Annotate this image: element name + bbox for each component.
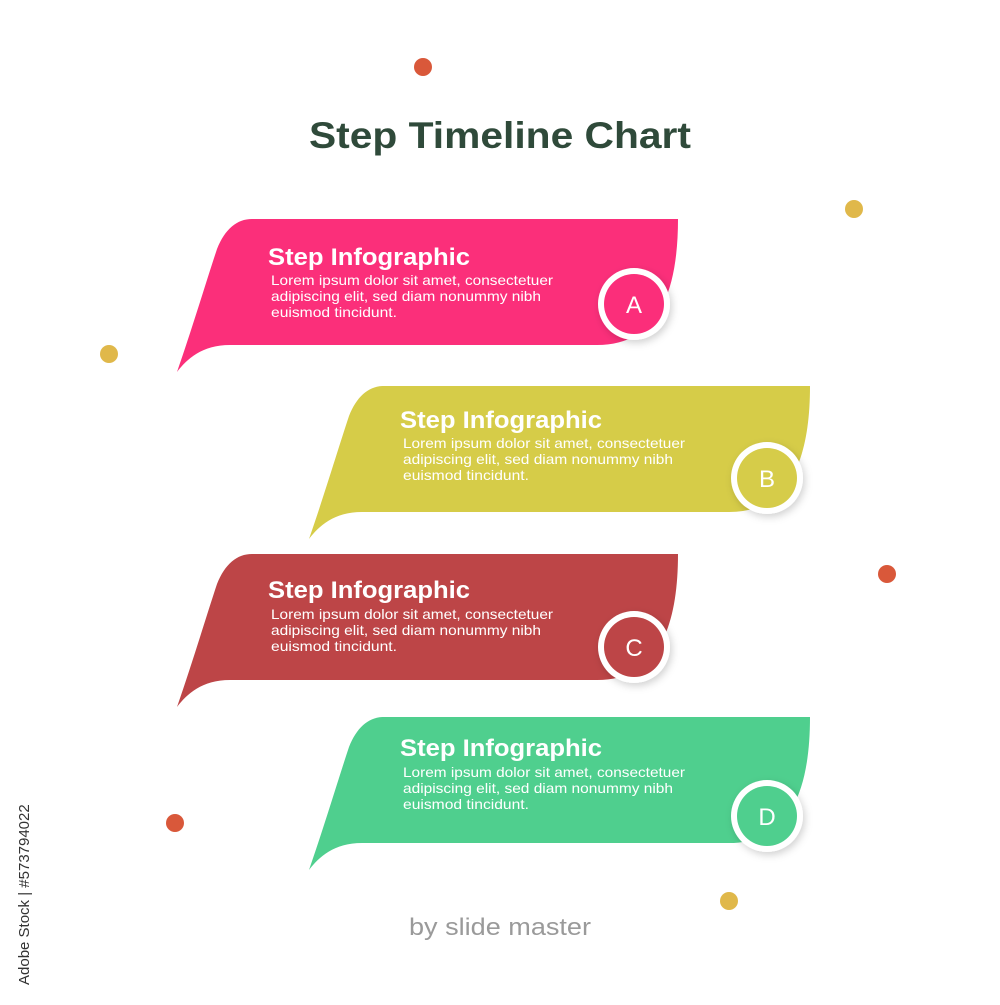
panel: step D: euismod tincidunt.	[403, 796, 529, 812]
panel: step B	[309, 386, 810, 539]
title: Step Timeline Chart	[309, 115, 691, 156]
panel: step A	[177, 219, 678, 372]
decorative dot: right	[878, 565, 896, 583]
panel: step C	[177, 554, 678, 707]
badge D	[731, 780, 803, 852]
panel: step D: Lorem ipsum dolor sit amet, consectetuer	[403, 764, 685, 780]
panel: step D: Step Infographic	[400, 735, 602, 762]
side watermark id: Adobe Stock | #573794022	[16, 804, 33, 985]
panel: step C: Step Infographic	[268, 577, 470, 604]
badge A	[598, 268, 670, 340]
panel: step A: Step Infographic	[268, 244, 470, 271]
badge D: D	[758, 804, 776, 831]
badge B: B	[759, 466, 775, 493]
panel: step B: adipiscing elit, sed diam nonummy nibh	[403, 451, 673, 467]
badge C	[598, 611, 670, 683]
panel: step C: Lorem ipsum dolor sit amet, consectetuer	[271, 606, 553, 622]
decorative dot: bottom	[720, 892, 738, 910]
panel: step A: adipiscing elit, sed diam nonummy nibh	[271, 288, 541, 304]
decorative dot: lower left	[166, 814, 184, 832]
decorative dot: upper right	[845, 200, 863, 218]
decorative dot: left	[100, 345, 118, 363]
panel: step C: euismod tincidunt.	[271, 638, 397, 654]
badge C: C	[625, 635, 643, 662]
panel: step B: Lorem ipsum dolor sit amet, consectetuer	[403, 435, 685, 451]
panel: step D: adipiscing elit, sed diam nonummy nibh	[403, 780, 673, 796]
footer credit: by slide master	[409, 914, 591, 941]
panel: step B: euismod tincidunt.	[403, 467, 529, 483]
panel: step A: euismod tincidunt.	[271, 304, 397, 320]
panel: step C: adipiscing elit, sed diam nonummy nibh	[271, 622, 541, 638]
panel: step D	[309, 717, 810, 870]
panel: step A: Lorem ipsum dolor sit amet, consectetuer	[271, 272, 553, 288]
badge B	[731, 442, 803, 514]
badge A: A	[626, 292, 642, 319]
panel: step B: Step Infographic	[400, 407, 602, 434]
decorative dot: top	[414, 58, 432, 76]
